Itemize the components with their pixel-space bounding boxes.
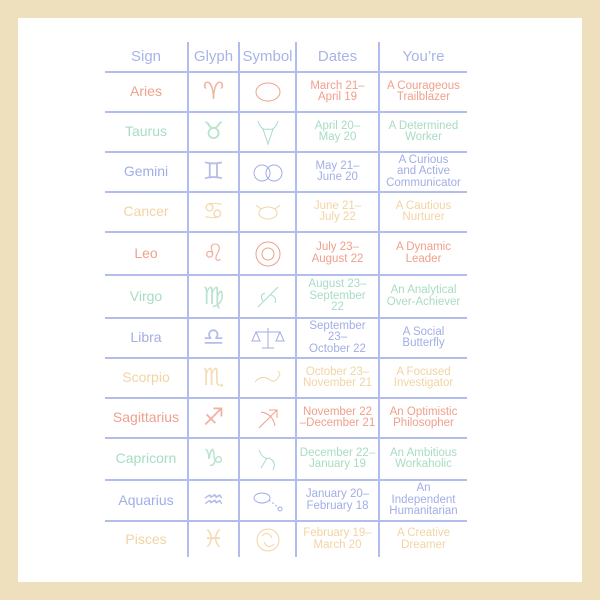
- zodiac table: ♍︎: [203, 282, 224, 310]
- zodiac table: October 22: [309, 343, 366, 355]
- zodiac table: Leader: [406, 252, 441, 264]
- zodiac table: Philosopher: [393, 417, 454, 429]
- zodiac table: Capricorn: [116, 450, 176, 466]
- zodiac table: Virgo: [130, 288, 162, 304]
- zodiac table: September: [309, 290, 366, 302]
- zodiac table: October 23–: [306, 366, 369, 378]
- zodiac table: August 23–: [308, 278, 367, 290]
- zodiac table: Butterfly: [402, 337, 445, 349]
- zodiac table: A Cautious: [396, 200, 451, 212]
- zodiac table: Sign: [131, 48, 161, 65]
- zodiac table: 23–: [328, 331, 347, 343]
- zodiac table: Humanitarian: [389, 505, 458, 517]
- zodiac table: A Determined: [389, 120, 458, 132]
- zodiac table: July 22: [319, 211, 356, 223]
- zodiac table: –December 21: [300, 417, 375, 429]
- zodiac table: Cancer: [123, 203, 169, 219]
- zodiac table: Gemini: [124, 163, 168, 179]
- zodiac table: ♒︎: [203, 486, 224, 514]
- zodiac table: 22: [331, 301, 344, 313]
- zodiac table: January 20–: [306, 488, 369, 500]
- zodiac table: May 20: [319, 131, 356, 143]
- zodiac table: Over-Achiever: [387, 296, 460, 308]
- zodiac table: Scorpio: [122, 369, 170, 385]
- zodiac table: [105, 42, 467, 557]
- zodiac table: September: [309, 320, 366, 332]
- zodiac table: May 21–: [315, 160, 360, 172]
- zodiac table: November 21: [303, 377, 372, 389]
- zodiac table: Taurus: [125, 123, 167, 139]
- zodiac table: Dates: [318, 48, 357, 65]
- zodiac table: A Dynamic: [396, 241, 451, 253]
- zodiac table: March 21–: [310, 80, 365, 92]
- zodiac table: An Ambitious: [390, 446, 457, 458]
- zodiac table: February 18: [306, 500, 368, 512]
- zodiac table: July 23–: [316, 241, 359, 253]
- zodiac table: ♉︎: [203, 117, 224, 145]
- zodiac table: Worker: [405, 131, 442, 143]
- zodiac table: ♋︎: [203, 197, 224, 225]
- zodiac table: A Social: [403, 326, 444, 338]
- zodiac table: ♑︎: [203, 444, 224, 472]
- zodiac table: December 22–: [300, 446, 375, 458]
- zodiac table: An Analytical: [391, 284, 456, 296]
- zodiac table: A Creative: [397, 527, 450, 539]
- zodiac table: ♓︎: [203, 525, 224, 553]
- zodiac table: ♐︎: [203, 403, 224, 431]
- zodiac table: June 21–: [314, 200, 361, 212]
- zodiac table: Independent: [392, 494, 455, 506]
- zodiac table: Aquarius: [118, 492, 174, 508]
- zodiac table: January 19: [309, 458, 366, 470]
- zodiac table: You’re: [402, 48, 444, 65]
- zodiac table: An: [416, 482, 431, 494]
- zodiac table: Nurturer: [402, 211, 445, 223]
- zodiac table: Symbol: [242, 48, 293, 65]
- zodiac table: August 22: [312, 252, 363, 264]
- zodiac table: ♊︎: [203, 157, 224, 185]
- zodiac table: Pisces: [125, 531, 167, 547]
- zodiac table: A Focused: [396, 366, 451, 378]
- zodiac table: April 20–: [315, 120, 360, 132]
- zodiac table: ♏︎: [203, 363, 224, 391]
- zodiac table: Aries: [130, 83, 162, 99]
- zodiac table: February 19–: [303, 527, 372, 539]
- zodiac table: November 22: [303, 406, 372, 418]
- zodiac table: A Curious: [399, 154, 448, 166]
- zodiac table: April 19: [318, 91, 357, 103]
- zodiac table: Leo: [134, 245, 158, 261]
- zodiac table: Communicator: [386, 177, 461, 189]
- zodiac table: Trailblazer: [397, 91, 450, 103]
- zodiac table: Libra: [130, 329, 162, 345]
- zodiac table: An Optimistic: [390, 406, 457, 418]
- zodiac table: ♌︎: [203, 239, 224, 267]
- zodiac table: June 20: [317, 171, 358, 183]
- zodiac table: Sagittarius: [113, 409, 179, 425]
- zodiac table: March 20: [314, 538, 361, 550]
- zodiac table: A Courageous: [387, 80, 460, 92]
- zodiac table: ♈︎: [203, 77, 224, 105]
- zodiac table: ♎︎: [203, 323, 224, 351]
- zodiac table: Investigator: [394, 377, 453, 389]
- zodiac table: Dreamer: [401, 538, 446, 550]
- zodiac table: Workaholic: [395, 458, 452, 470]
- zodiac table: and Active: [397, 165, 450, 177]
- zodiac table: Glyph: [194, 48, 233, 65]
